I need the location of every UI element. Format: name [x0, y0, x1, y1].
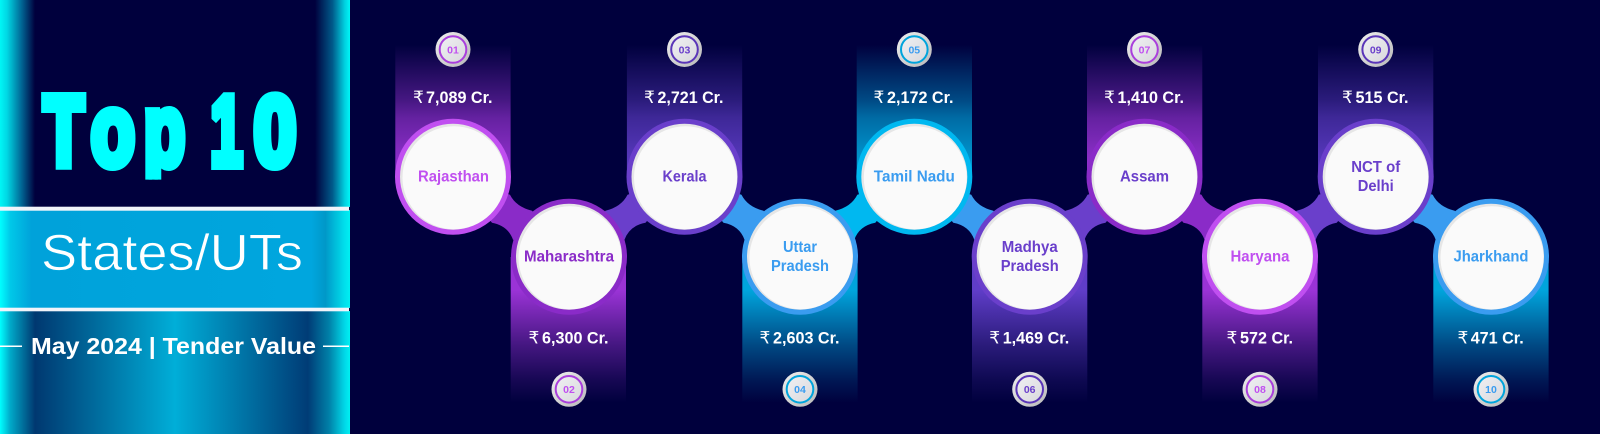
- item 02: Maharashtra: 02: [563, 384, 575, 396]
- subheading: States/UTs: States/UTs: [41, 224, 303, 281]
- item 03: Kerala: 2,721 Cr.: [658, 89, 724, 107]
- item 10: Jharkhand: 10: [1485, 384, 1497, 396]
- item 10: Jharkhand: Jharkhand: [1454, 249, 1528, 266]
- item 01: Rajasthan: Rajasthan: [418, 169, 489, 186]
- item 04: Uttar Pradesh: 04: [794, 384, 806, 396]
- item 06: Madhya Pradesh: Pradesh: [1001, 258, 1059, 275]
- item 01: Rajasthan: 7,089 Cr.: [426, 89, 492, 107]
- item 07: Assam: ₹: [1104, 88, 1115, 108]
- heading: Top 10: 0: [254, 76, 296, 186]
- item 04: Uttar Pradesh: [742, 199, 858, 407]
- item 09: NCT of Delhi: ₹: [1342, 88, 1353, 108]
- item 07: Assam: 1,410 Cr.: [1118, 89, 1184, 107]
- item 07: Assam: [1086, 32, 1202, 235]
- item 03: Kerala: 03: [679, 44, 690, 56]
- item 04: Uttar Pradesh: Pradesh: [771, 258, 829, 275]
- item 01: Rajasthan: ₹: [413, 88, 424, 108]
- item 05: Tamil Nadu: 05: [908, 44, 920, 56]
- item 03: Kerala: Kerala: [662, 169, 707, 186]
- item 09: NCT of Delhi: Delhi: [1358, 178, 1394, 195]
- item 04: Uttar Pradesh: Uttar: [783, 239, 817, 256]
- heading: Top 10: o: [91, 75, 135, 187]
- item 09: NCT of Delhi: NCT of: [1351, 159, 1401, 176]
- item 07: Assam: Assam: [1120, 169, 1169, 186]
- heading: Top 10: T: [44, 76, 84, 186]
- panel: title sidebar: [0, 0, 350, 434]
- item 05: Tamil Nadu: ₹: [874, 88, 884, 108]
- item 04: Uttar Pradesh: 2,603 Cr.: [773, 330, 840, 348]
- item 08: Haryana: 08: [1254, 384, 1266, 396]
- heading: Top 10: 1: [210, 76, 242, 186]
- item 06: Madhya Pradesh: 06: [1024, 384, 1036, 396]
- item 08: Haryana: Haryana: [1230, 249, 1290, 266]
- item 02: Maharashtra: ₹: [528, 328, 539, 348]
- item 09: NCT of Delhi: [1318, 32, 1434, 235]
- item 01: Rajasthan: [395, 32, 511, 235]
- heading: Top 10: p: [144, 75, 185, 187]
- item 07: Assam: 07: [1139, 44, 1150, 56]
- gradient columns: [395, 42, 1549, 403]
- item 09: NCT of Delhi: 515 Cr.: [1356, 89, 1408, 107]
- connectors between circles: [453, 177, 1492, 257]
- item 05: Tamil Nadu: 2,172 Cr.: [887, 89, 954, 107]
- item 06: Madhya Pradesh: 1,469 Cr.: [1003, 330, 1069, 348]
- item 08: Haryana: ₹: [1226, 328, 1237, 348]
- item 09: NCT of Delhi: 09: [1370, 44, 1382, 56]
- item 08: Haryana: 572 Cr.: [1240, 330, 1293, 348]
- item 10: Jharkhand: ₹: [1458, 328, 1468, 348]
- item 05: Tamil Nadu: [856, 32, 972, 235]
- item 05: Tamil Nadu: Tamil Nadu: [874, 169, 955, 186]
- item 06: Madhya Pradesh: Madhya: [1002, 239, 1058, 256]
- item 08: Haryana: [1202, 199, 1318, 407]
- heading: Top 10: [41, 91, 297, 180]
- item 03: Kerala: ₹: [644, 88, 655, 108]
- item 01: Rajasthan: 01: [447, 44, 459, 56]
- item 06: Madhya Pradesh: [972, 199, 1088, 407]
- item 04: Uttar Pradesh: ₹: [760, 328, 770, 348]
- item 06: Madhya Pradesh: ₹: [989, 328, 1000, 348]
- item 10: Jharkhand: [1433, 199, 1549, 407]
- item 02: Maharashtra: Maharashtra: [524, 249, 614, 266]
- item 02: Maharashtra: 6,300 Cr.: [542, 330, 608, 348]
- item 10: Jharkhand: 471 Cr.: [1471, 330, 1524, 348]
- item 03: Kerala: [626, 32, 742, 235]
- item 02: Maharashtra: [511, 199, 627, 407]
- caption: May 2024 Tender Value: May 2024 | Tender Value: [31, 333, 316, 359]
